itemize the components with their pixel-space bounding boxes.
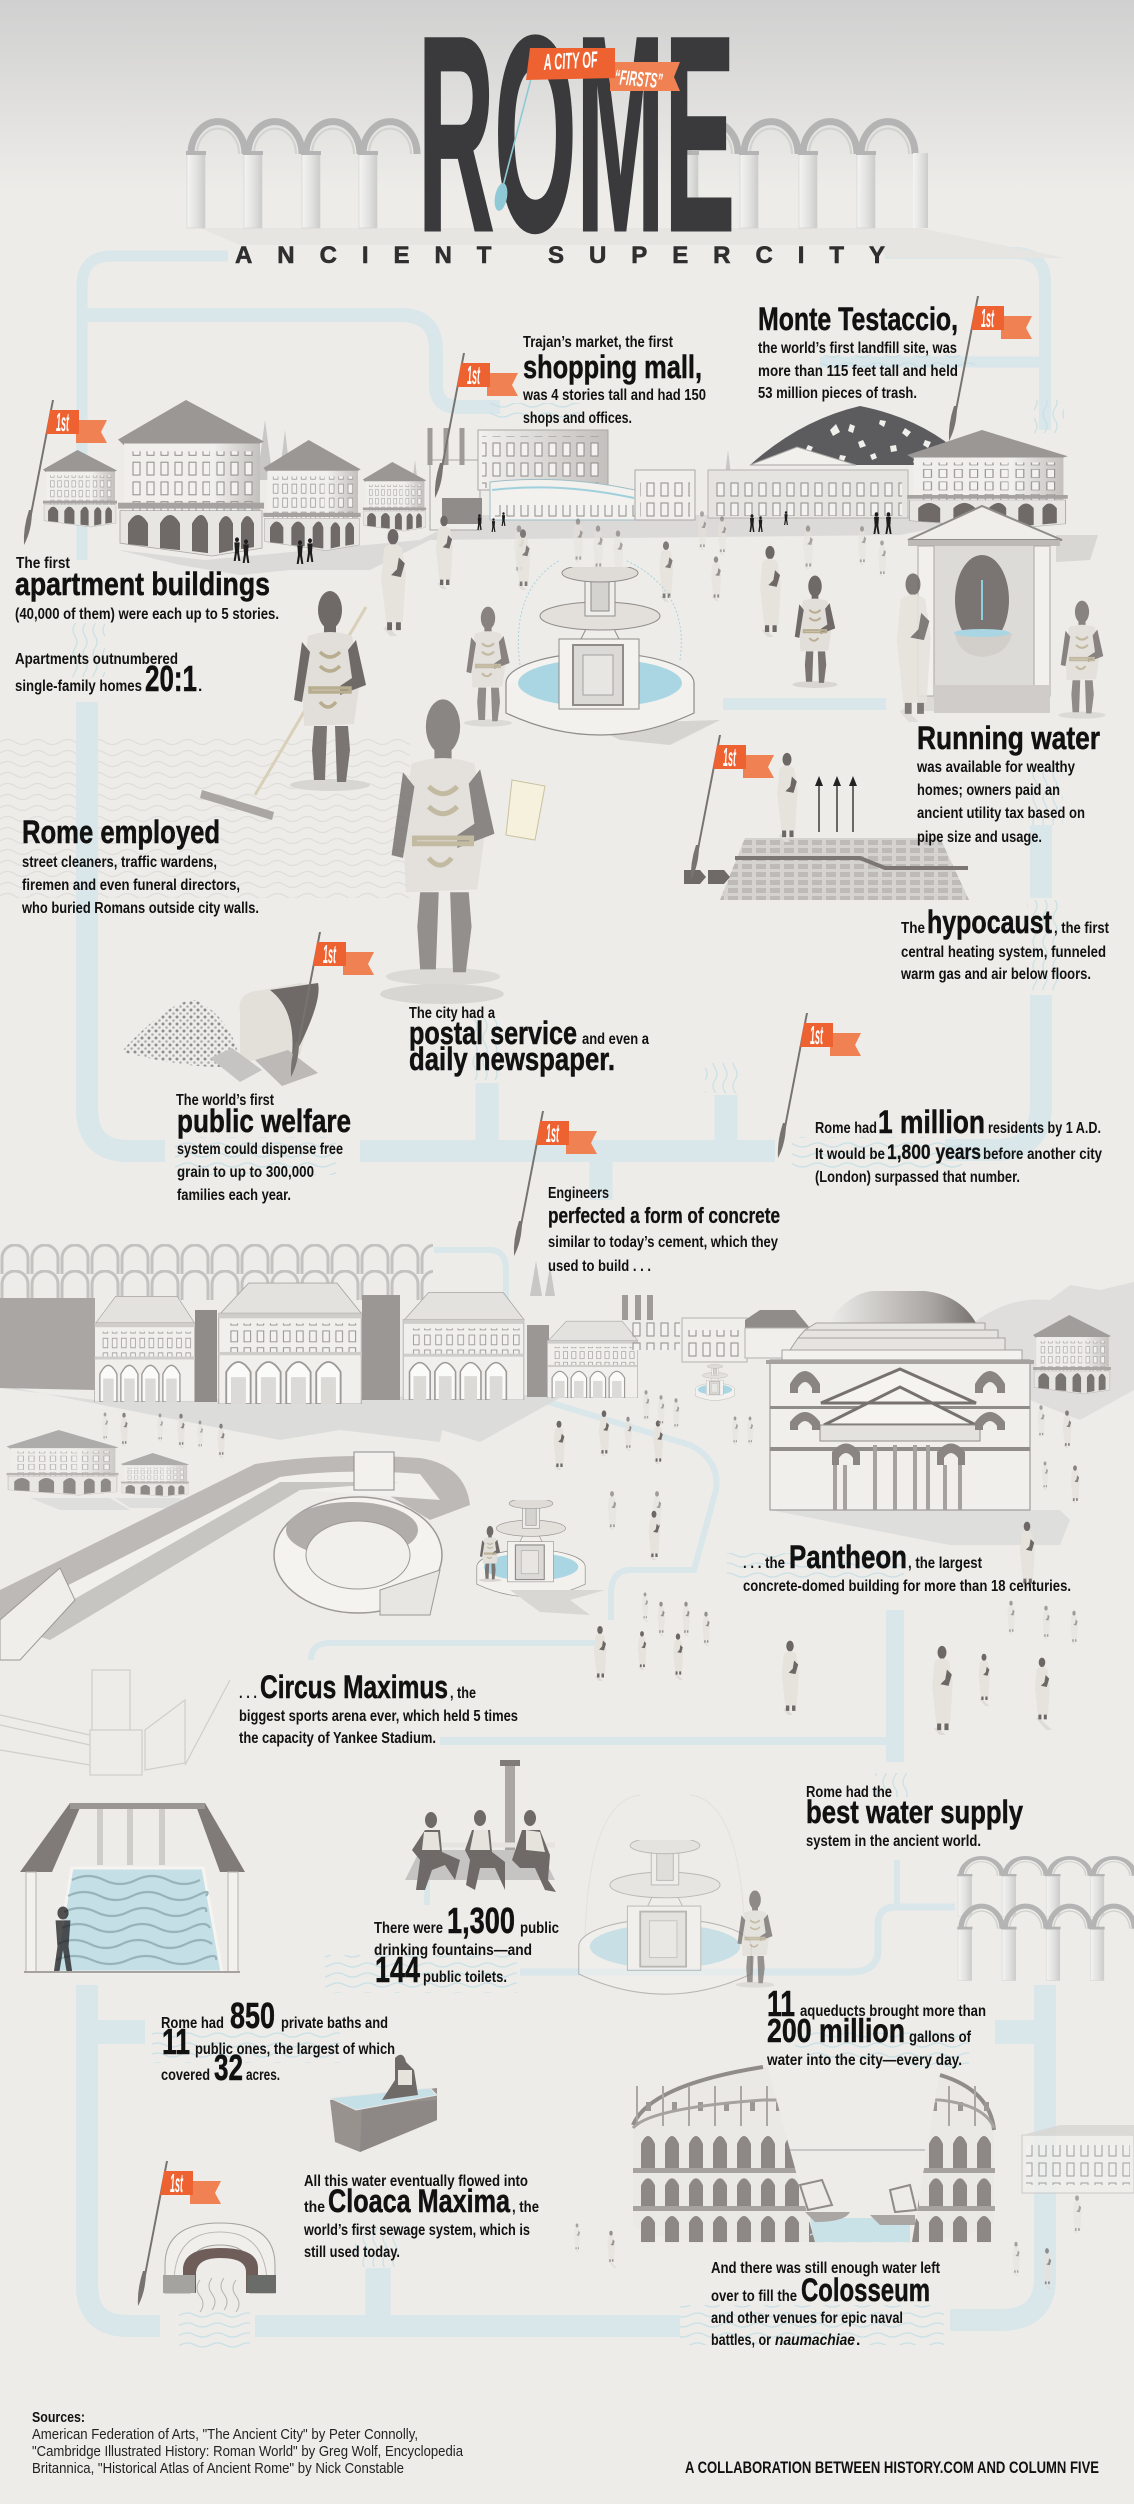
arch shadows <box>200 228 1065 258</box>
text: monte testaccio: the world’s first landfill site, was <box>758 340 957 357</box>
text: circus maximus: biggest sports arena ever, which held 5 times <box>239 1708 518 1725</box>
plaza people <box>381 516 837 727</box>
text: pantheon: concrete-domed building for more than 18 centuries. <box>743 1578 1071 1595</box>
text: concrete: perfected a form of concrete <box>548 1203 780 1228</box>
text: aqueducts: water into the city—every day. <box>766 2052 962 2069</box>
text: shopping mall <box>522 334 706 427</box>
text: hypocaust <box>900 904 1109 983</box>
sources <box>32 2410 464 2477</box>
text: cloaca maxima: All this water eventually flowed into <box>304 2173 528 2190</box>
text: running water <box>916 720 1100 846</box>
text: monte testaccio: more than 115 feet tall and held <box>758 363 958 380</box>
text: baths: Rome had <box>161 2015 224 2032</box>
sources: "Cambridge Illustrated History: Roman World" by Greg Wolf, Encyclopedia <box>32 2444 464 2460</box>
city buildings <box>95 1283 638 1404</box>
bathtub with bather <box>330 2055 437 2152</box>
text: baths: public ones, the largest of which <box>195 2041 395 2058</box>
text: hypocaust: hypocaust <box>927 904 1052 940</box>
text: shopping mall: Trajan’s market, the first <box>523 334 673 351</box>
figure: water carrier <box>464 607 512 727</box>
ground shadow <box>0 1385 565 1442</box>
text: fountains and toilets: drinking fountains—and <box>374 1942 532 1959</box>
text: colosseum: And there was still enough water left <box>711 2260 940 2277</box>
text: hypocaust: warm gas and air below floors. <box>900 966 1091 983</box>
icon: left aqueduct arches <box>186 122 417 228</box>
text: public welfare: system could dispense free <box>177 1141 343 1158</box>
sweeper figure <box>200 591 370 820</box>
text: baths: covered <box>161 2067 210 2084</box>
right apartments <box>907 430 1068 529</box>
text: hypocaust: , the first <box>1054 920 1109 937</box>
hypocaust illustration <box>684 753 969 900</box>
text: aqueducts: gallons of <box>909 2029 972 2046</box>
text: colosseum <box>711 2260 940 2349</box>
text: one million residents: 1 million <box>878 1104 985 1140</box>
flags: firsts markers <box>24 296 1032 2306</box>
text: public welfare: grain to up to 300,000 <box>177 1164 314 1181</box>
text: postal service: postal service <box>409 1015 577 1051</box>
text: pantheon <box>743 1539 1071 1595</box>
text: concrete: Engineers <box>548 1185 609 1202</box>
text: running water: pipe size and usage. <box>917 829 1042 846</box>
text: baths: 32 <box>214 2047 243 2088</box>
running water fountain building <box>897 506 1106 742</box>
text: one million residents: It would be <box>815 1146 885 1163</box>
text: circus maximus: Circus Maximus <box>260 1669 448 1705</box>
text: pantheon: . . . the <box>743 1555 785 1572</box>
text: concrete: similar to today’s cement, which they <box>548 1234 778 1251</box>
trajan market <box>430 428 695 530</box>
far right buildings <box>1022 2125 1134 2193</box>
figure: woman with jug <box>1058 601 1106 719</box>
bath house illustration <box>20 1803 245 1973</box>
text: one million residents: 1,800 years <box>887 1141 981 1164</box>
text: running water: Running water <box>917 720 1100 756</box>
text: circus maximus: . . . <box>239 1685 257 1702</box>
text: running water: was available for wealthy <box>916 759 1075 776</box>
text: concrete: used to build . . . <box>548 1258 651 1275</box>
circus structure outline <box>0 1670 230 1775</box>
text: rome employed <box>21 814 259 917</box>
text: colosseum: battles, or <box>711 2332 771 2349</box>
background wave pattern <box>0 737 410 898</box>
lower right aqueduct <box>957 1858 1134 1981</box>
sources: American Federation of Arts, "The Ancient City" by Peter Connolly, <box>32 2427 418 2443</box>
small fountains <box>477 1364 735 1597</box>
text: rome employed: Rome employed <box>22 814 220 850</box>
icon: spoon pole <box>493 75 532 212</box>
text: public welfare: families each year. <box>177 1187 291 1204</box>
text: apartment buildings: . <box>198 678 202 695</box>
text: one million residents: before another city <box>983 1146 1102 1163</box>
text: aqueducts: 200 million <box>767 2012 905 2049</box>
text: cloaca maxima <box>303 2173 539 2261</box>
text: pantheon: Pantheon <box>789 1539 907 1575</box>
figure: toga gold <box>793 576 837 688</box>
lower city scene <box>0 1244 1134 2292</box>
text: shopping mall: was 4 stories tall and had 150 <box>522 387 706 404</box>
text: fountains and toilets: public <box>520 1920 559 1937</box>
text: one million residents: Rome had <box>815 1120 877 1137</box>
text: fountains and toilets: public toilets. <box>423 1969 507 1986</box>
text: cloaca maxima: world’s first sewage system, which is <box>303 2222 530 2239</box>
small figure <box>479 1526 501 1582</box>
monte testaccio <box>750 406 972 465</box>
figure: toga left <box>381 529 413 651</box>
text: cloaca maxima: still used today. <box>304 2244 400 2261</box>
pale plaza figures <box>514 511 889 581</box>
aqueduct backdrop <box>0 1244 433 1300</box>
text: aqueducts: aqueducts brought more than <box>800 2003 986 2020</box>
text: monte testaccio: Monte Testaccio, <box>758 301 958 337</box>
figure at pale fountain <box>736 1890 774 1988</box>
text: baths: 11 <box>162 2021 190 2062</box>
text: apartment buildings: single-family homes <box>15 678 142 695</box>
text: apartment buildings: 20:1 <box>145 658 197 699</box>
text: postal service: The city had a <box>409 1005 495 1022</box>
text: cloaca maxima: the <box>304 2199 325 2216</box>
text: postal service: and even a <box>582 1031 649 1048</box>
latrine illustration <box>405 1760 556 1892</box>
text: baths: 850 <box>230 1995 275 2036</box>
text: fountains and toilets: 144 <box>375 1949 420 1990</box>
text: one million residents <box>815 1104 1102 1186</box>
central fountain <box>506 560 720 745</box>
text: colosseum: . <box>856 2332 860 2349</box>
water pipes network <box>82 253 1045 2326</box>
text: cloaca maxima: , the <box>512 2199 539 2216</box>
text: public welfare: public welfare <box>177 1103 351 1139</box>
text: hypocaust: The <box>901 920 925 937</box>
text: circus maximus <box>239 1669 518 1747</box>
building shadows <box>118 515 1000 575</box>
figure: toga right <box>760 546 787 650</box>
cloaca maxima arch <box>163 2223 276 2312</box>
text: apartment buildings: Apartments outnumbered <box>15 651 178 668</box>
text: baths: private baths and <box>281 2015 388 2032</box>
figure: man at fountain <box>897 573 940 742</box>
banner: a city of firsts: “FIRSTS” <box>614 66 664 93</box>
pantheon <box>766 1291 1034 1510</box>
text: colosseum: Colosseum <box>801 2272 930 2308</box>
text: monte testaccio: 53 million pieces of trash. <box>758 385 917 402</box>
pale fountain <box>579 1795 751 1994</box>
text: aqueducts: 11 <box>767 1983 795 2024</box>
subtitle: ANCIENT SUPERCITY <box>235 242 885 269</box>
text: shopping mall: shopping mall, <box>523 349 702 385</box>
text: apartment buildings <box>15 555 279 699</box>
text: one million residents: (London) surpassed that number. <box>815 1169 1020 1186</box>
text: cloaca maxima: Cloaca Maxima <box>328 2183 510 2219</box>
text: baths <box>161 1995 395 2088</box>
text: baths: acres. <box>246 2067 280 2084</box>
apartment buildings <box>43 400 426 556</box>
text: rome employed: street cleaners, traffic wardens, <box>22 854 217 871</box>
grain and bread icon <box>123 983 319 1086</box>
distant buildings <box>7 1261 1111 1510</box>
text: best water supply: best water supply <box>806 1794 1023 1830</box>
text: public welfare: The world’s first <box>176 1092 274 1109</box>
circus maximus <box>0 1452 470 1660</box>
banner: a city of firsts <box>526 46 680 93</box>
icon: right aqueduct arches <box>679 122 928 228</box>
text: circus maximus: , the <box>450 1685 476 1702</box>
text: best water supply: system in the ancient world. <box>806 1833 981 1850</box>
text: fountains and toilets: 1,300 <box>447 1900 515 1941</box>
text: best water supply <box>806 1784 1023 1850</box>
text: shopping mall: shops and offices. <box>523 410 632 427</box>
title banner area: arches, ROME, subtitle <box>186 0 1065 289</box>
colosseum <box>633 2050 996 2242</box>
figure: toga arm out <box>436 516 457 599</box>
text: running water: homes; owners paid an <box>917 782 1060 799</box>
text: rome employed: firemen and even funeral directors, <box>22 877 240 894</box>
text: apartment buildings: (40,000 of them) were each up to 5 stories. <box>15 606 279 623</box>
text: postal service: daily newspaper. <box>409 1041 615 1077</box>
text: one million residents: residents by 1 A.D. <box>988 1120 1101 1137</box>
hill backdrop <box>960 1282 1134 1420</box>
sources: Sources: <box>32 2410 85 2426</box>
text: running water: ancient utility tax based on <box>917 805 1085 822</box>
sources: Britannica, "Historical Atlas of Ancient Rome" by Nick Constable <box>32 2461 404 2477</box>
text: monte testaccio <box>758 301 958 402</box>
blue wave patches <box>70 355 1064 2348</box>
postal service figure <box>380 699 545 1004</box>
text: postal service <box>409 1005 649 1077</box>
text: apartment buildings: apartment buildings <box>15 566 270 602</box>
text: colosseum: and other venues for epic naval <box>711 2310 903 2327</box>
banner: a city of firsts: A CITY OF <box>542 46 599 75</box>
temple block <box>708 447 908 518</box>
text: circus maximus: the capacity of Yankee Stadium. <box>239 1730 436 1747</box>
text: fountains and toilets: There were <box>374 1920 443 1937</box>
text: aqueducts <box>766 1983 986 2069</box>
text: apartment buildings: The first <box>16 555 70 572</box>
text: fountains and toilets <box>374 1900 559 1990</box>
text: public welfare <box>176 1092 351 1204</box>
text: colosseum: naumachiae <box>775 2332 855 2349</box>
text: colosseum: over to fill the <box>711 2288 797 2305</box>
upper city skyline <box>43 400 1068 610</box>
small background figures <box>234 511 892 564</box>
text: pantheon: , the largest <box>908 1555 982 1572</box>
text: rome employed: who buried Romans outside city walls. <box>21 900 259 917</box>
text: concrete <box>548 1185 780 1275</box>
text: best water supply: Rome had the <box>806 1784 892 1801</box>
crowds of small figures <box>102 1390 1084 2292</box>
